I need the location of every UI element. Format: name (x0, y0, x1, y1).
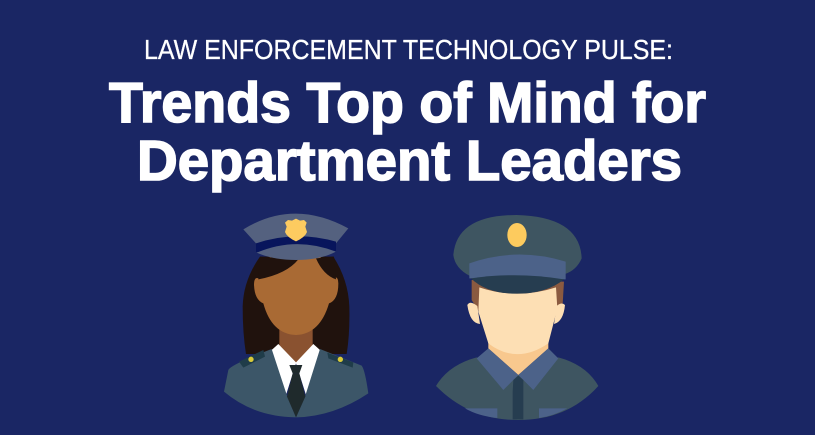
fringe (258, 257, 336, 279)
cap (243, 214, 348, 260)
pockets (465, 408, 567, 418)
epaulettes (239, 350, 353, 368)
icon: female officer (224, 214, 368, 417)
face (254, 257, 338, 335)
icon: male officer (436, 215, 598, 420)
tie (287, 365, 305, 417)
title: Department Leaders (137, 129, 682, 193)
title (109, 71, 706, 193)
eyebrow heading: LAW ENFORCEMENT TECHNOLOGY PULSE: (144, 34, 673, 65)
cap (453, 215, 582, 294)
tie (513, 376, 523, 419)
collar (477, 348, 558, 390)
title: Trends Top of Mind for (109, 71, 706, 135)
